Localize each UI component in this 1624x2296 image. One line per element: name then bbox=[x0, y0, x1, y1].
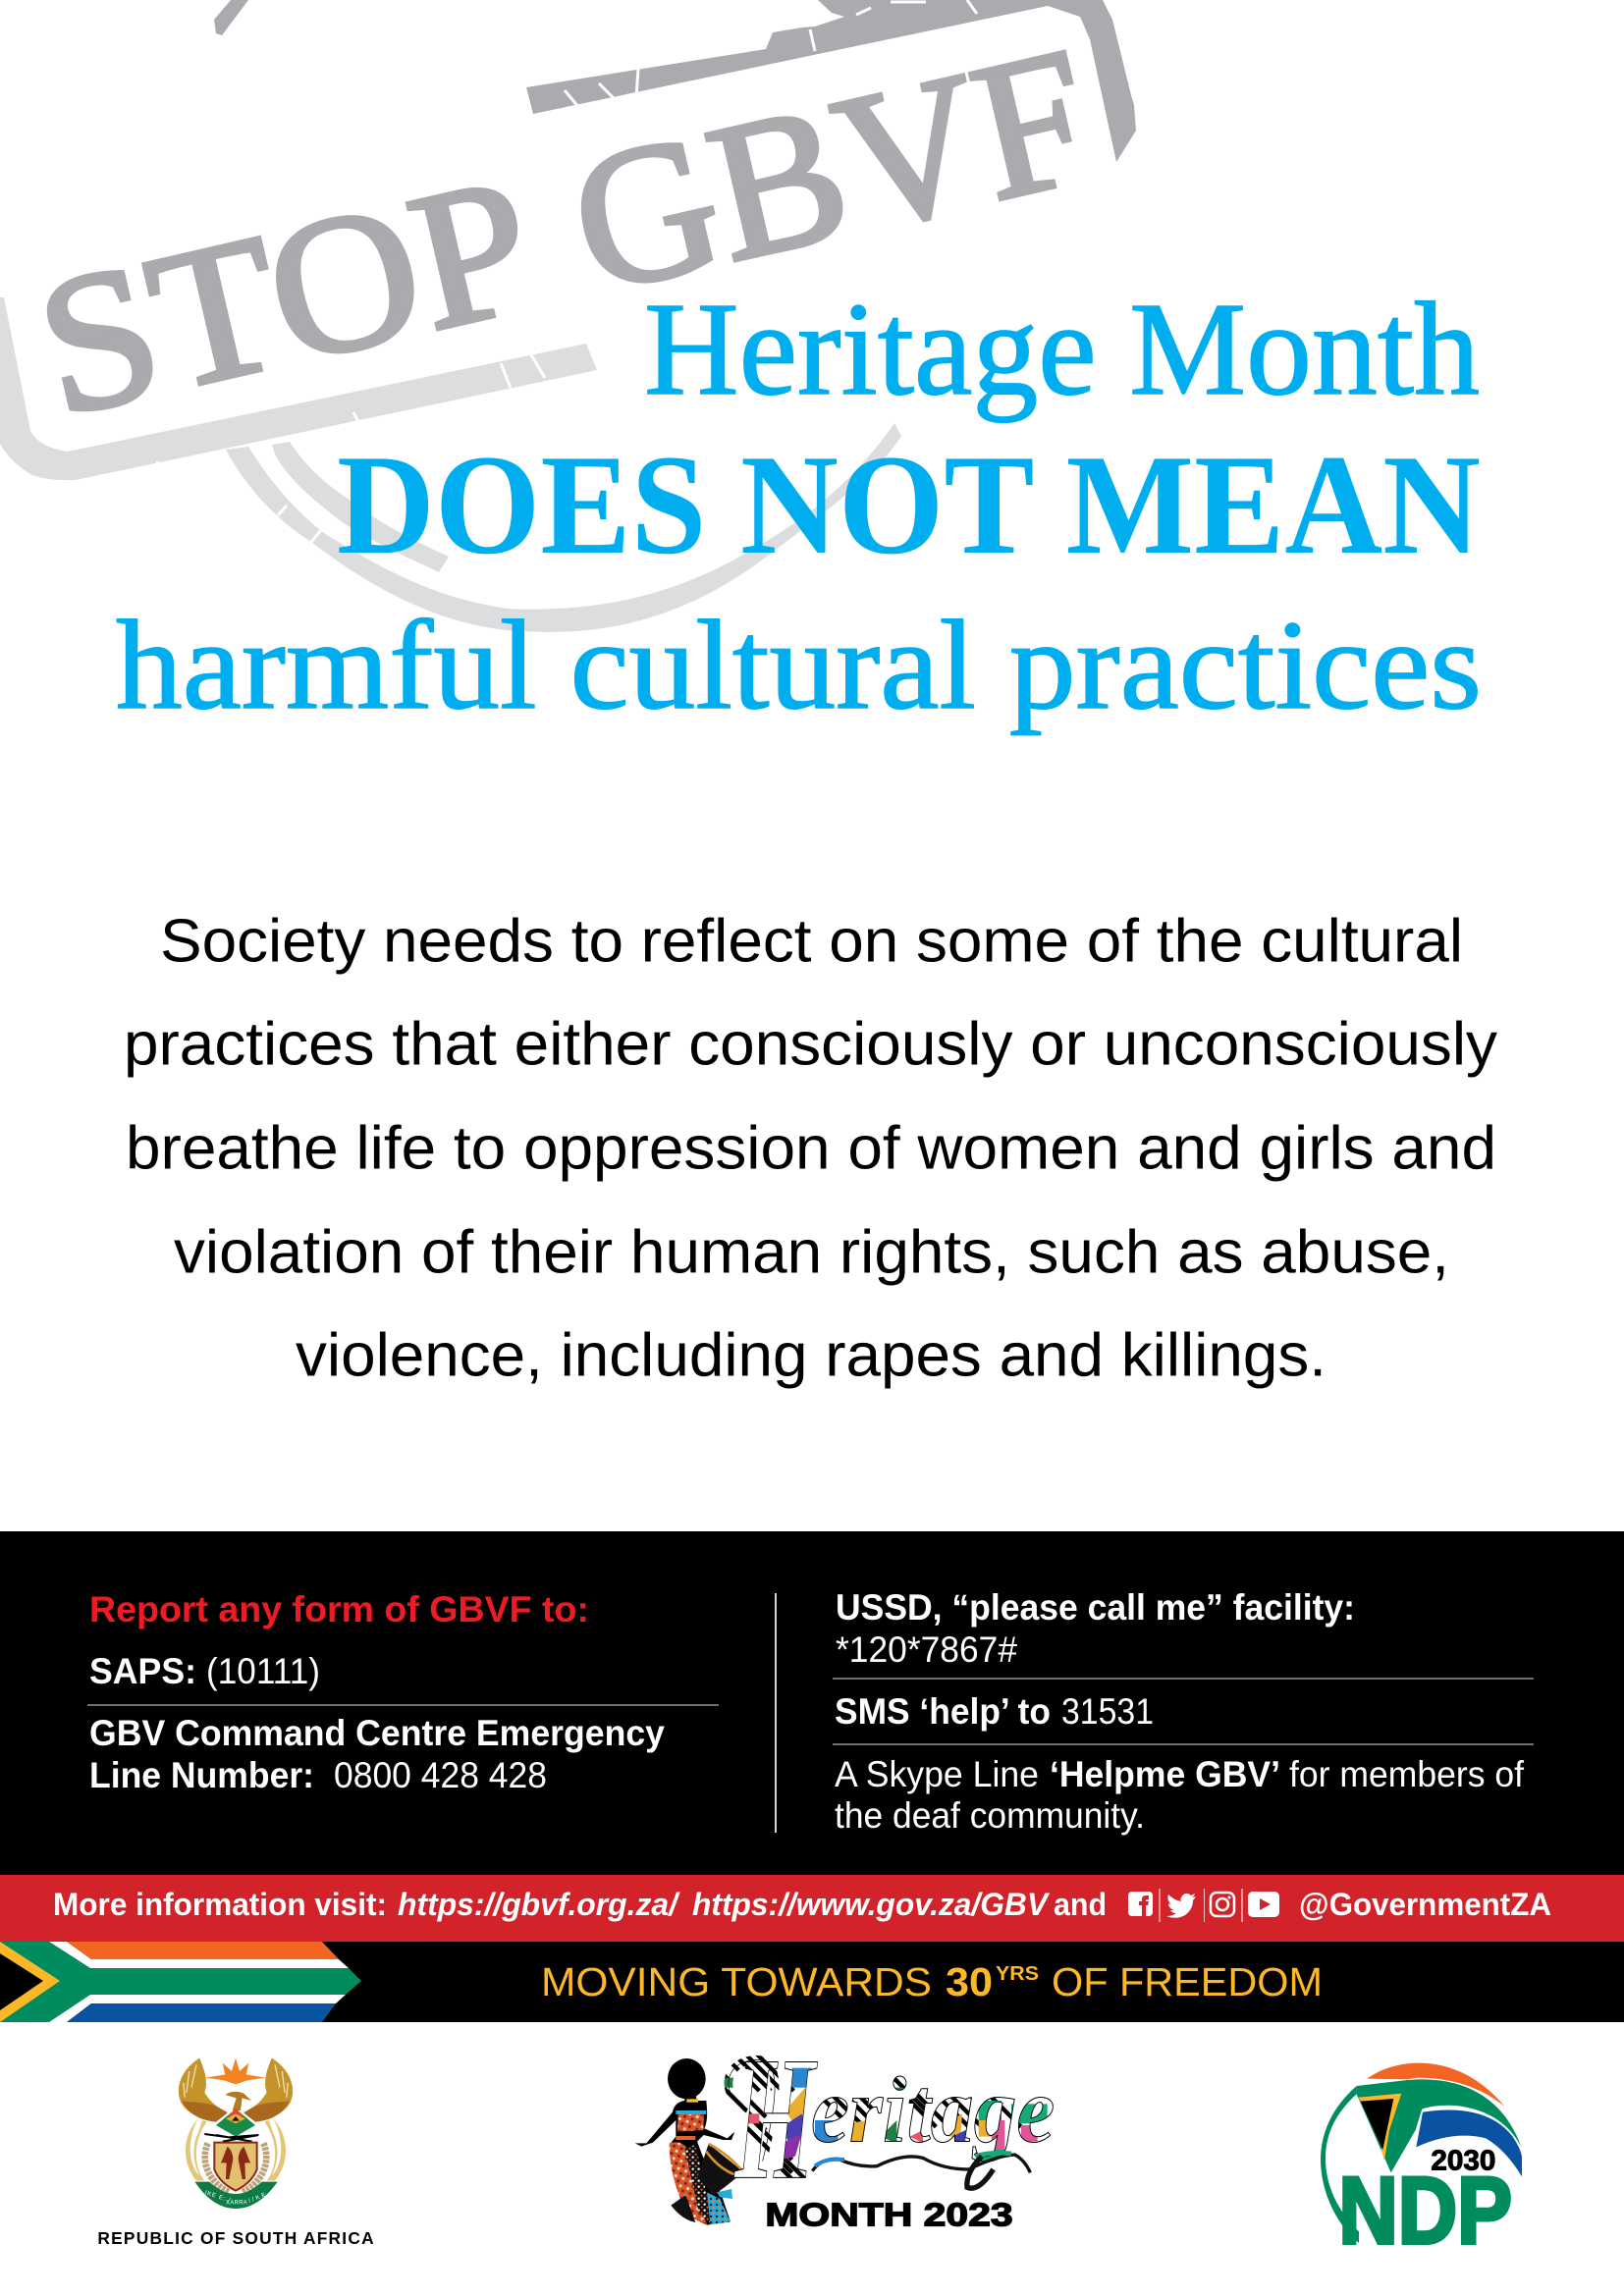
wordmark flourish bbox=[812, 2155, 1030, 2172]
heritage wordmark bbox=[729, 2020, 1055, 2216]
blue arc bbox=[1416, 2109, 1522, 2176]
body paragraph bbox=[124, 907, 1497, 1390]
stamp wording: GBVF bbox=[554, 7, 1110, 335]
icon: instagram bbox=[1211, 1893, 1234, 1916]
title line 2: DOES NOT MEAN bbox=[337, 425, 1481, 584]
orange arc bbox=[1367, 2063, 1504, 2107]
wheat bbox=[205, 2143, 266, 2192]
stamp: stop GBVF bbox=[0, 0, 1136, 632]
wings bbox=[179, 2058, 293, 2122]
title line 1: Heritage Month bbox=[644, 276, 1480, 423]
drummer figure bbox=[635, 2058, 743, 2225]
stamp wording bbox=[20, 7, 1110, 458]
black triangle bbox=[1361, 2099, 1393, 2150]
SAPS number bbox=[89, 1651, 320, 1691]
command centre number: GBV Command Centre Emergency bbox=[89, 1713, 665, 1753]
icon: twitter bbox=[1166, 1894, 1196, 1918]
banner: more information: More information visit: bbox=[53, 1887, 387, 1922]
heritage wordmark: H bbox=[733, 2020, 818, 2216]
green ring bbox=[1321, 2086, 1359, 2243]
yellow chevron bbox=[1358, 2094, 1401, 2161]
banner: more information: https://gbvf.org.za/ bbox=[398, 1887, 680, 1922]
Skype line: for members of bbox=[1289, 1754, 1525, 1794]
banner: more information: @GovernmentZA bbox=[1299, 1887, 1551, 1922]
USSD: *120*7867# bbox=[836, 1629, 1017, 1670]
freedom slogan: 30 bbox=[946, 1959, 993, 2004]
banner: moving towards 30 years bbox=[0, 1942, 1624, 2022]
Skype line: the deaf community. bbox=[835, 1795, 1145, 1836]
2030: 2030 bbox=[1431, 2146, 1495, 2177]
Skype line: A Skype Line bbox=[835, 1754, 1039, 1794]
stamp wording: STOP bbox=[20, 135, 552, 458]
command centre number: Line Number: bbox=[89, 1755, 314, 1795]
motto ribbon: //KE bbox=[247, 2192, 267, 2205]
month 2023: MONTH 2023 bbox=[765, 2197, 1013, 2233]
body paragraph: breathe life to oppression of women and girls and bbox=[126, 1115, 1496, 1182]
logo: coat of arms bbox=[97, 2058, 374, 2248]
banner: more information: and bbox=[1054, 1887, 1107, 1922]
logo: NDP 2030 bbox=[1321, 2063, 1522, 2264]
coat of arms caption: REPUBLIC OF SOUTH AFRICA bbox=[97, 2228, 374, 2248]
icon: youtube bbox=[1248, 1892, 1279, 1917]
icon: facebook bbox=[1128, 1892, 1153, 1916]
icon: south african flag bbox=[0, 1942, 361, 2022]
command centre number bbox=[89, 1713, 665, 1795]
motto ribbon bbox=[194, 2182, 278, 2209]
SMS: SMS ‘help’ to bbox=[835, 1691, 1051, 1732]
logo: heritage month 2023 bbox=[635, 2020, 1055, 2233]
command centre number: 0800 428 428 bbox=[334, 1755, 547, 1795]
heritage wordmark: eritage bbox=[811, 2058, 1055, 2163]
title line 3: harmful cultural practices bbox=[116, 595, 1482, 736]
stamp lower frame bbox=[0, 297, 597, 480]
tusks bbox=[186, 2118, 207, 2181]
spear and kerrie bbox=[204, 2134, 258, 2142]
stamp ring bbox=[226, 423, 901, 632]
stamp top-left fragment bbox=[214, 0, 248, 35]
drum bbox=[698, 2144, 743, 2196]
body paragraph: Society needs to reflect on some of the cultural bbox=[160, 907, 1463, 976]
freedom slogan: YRS bbox=[996, 1963, 1039, 1985]
body paragraph: violence, including rapes and killings. bbox=[296, 1321, 1326, 1390]
stamp upper frame bbox=[526, 0, 1136, 162]
freedom slogan: OF FREEDOM bbox=[1052, 1959, 1323, 2004]
body paragraph: violation of their human rights, such as abuse, bbox=[174, 1219, 1449, 1286]
secretary bird head bbox=[225, 2092, 251, 2110]
title bbox=[116, 276, 1482, 736]
motto ribbon: XARRA bbox=[226, 2201, 247, 2207]
protea diamond bbox=[216, 2109, 255, 2137]
USSD bbox=[836, 1587, 1355, 1670]
column: report GBVF bbox=[87, 1589, 719, 1795]
SAPS number: (10111) bbox=[206, 1651, 320, 1691]
freedom slogan: MOVING TOWARDS bbox=[541, 1959, 932, 2004]
NDP: NDP bbox=[1338, 2158, 1512, 2264]
body paragraph: practices that either consciously or unconsciously bbox=[124, 1011, 1497, 1078]
Skype line bbox=[835, 1754, 1525, 1836]
banner: more information bbox=[0, 1875, 1624, 1942]
banner: more information: https://www.gov.za/GBV bbox=[692, 1887, 1051, 1922]
report heading: Report any form of GBVF to: bbox=[89, 1589, 589, 1629]
green flag sweep bbox=[1357, 2079, 1521, 2172]
freedom slogan bbox=[541, 1959, 1323, 2004]
column: other channels bbox=[833, 1587, 1534, 1836]
panel: reporting contacts bbox=[0, 1531, 1624, 1875]
Skype line: ‘Helpme GBV’ bbox=[1050, 1754, 1280, 1794]
sun bbox=[205, 2058, 266, 2084]
motto ribbon: IKE E: / bbox=[204, 2190, 231, 2204]
SAPS number: SAPS: bbox=[89, 1651, 196, 1691]
SMS: 31531 bbox=[1061, 1691, 1154, 1732]
shield bbox=[214, 2143, 257, 2191]
USSD: USSD, “please call me” facility: bbox=[836, 1587, 1355, 1628]
